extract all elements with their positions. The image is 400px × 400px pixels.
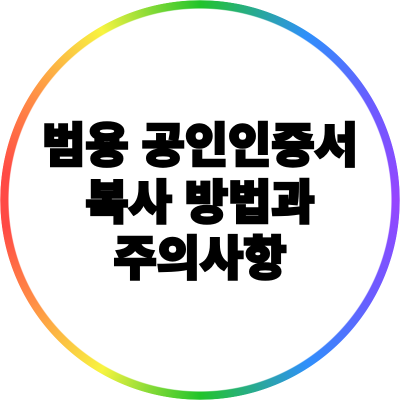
title: 범용 공인인증서 — [42, 119, 358, 172]
title: 복사 방법과 — [85, 176, 315, 228]
title: 주의사항 — [114, 232, 286, 285]
title — [42, 119, 358, 285]
